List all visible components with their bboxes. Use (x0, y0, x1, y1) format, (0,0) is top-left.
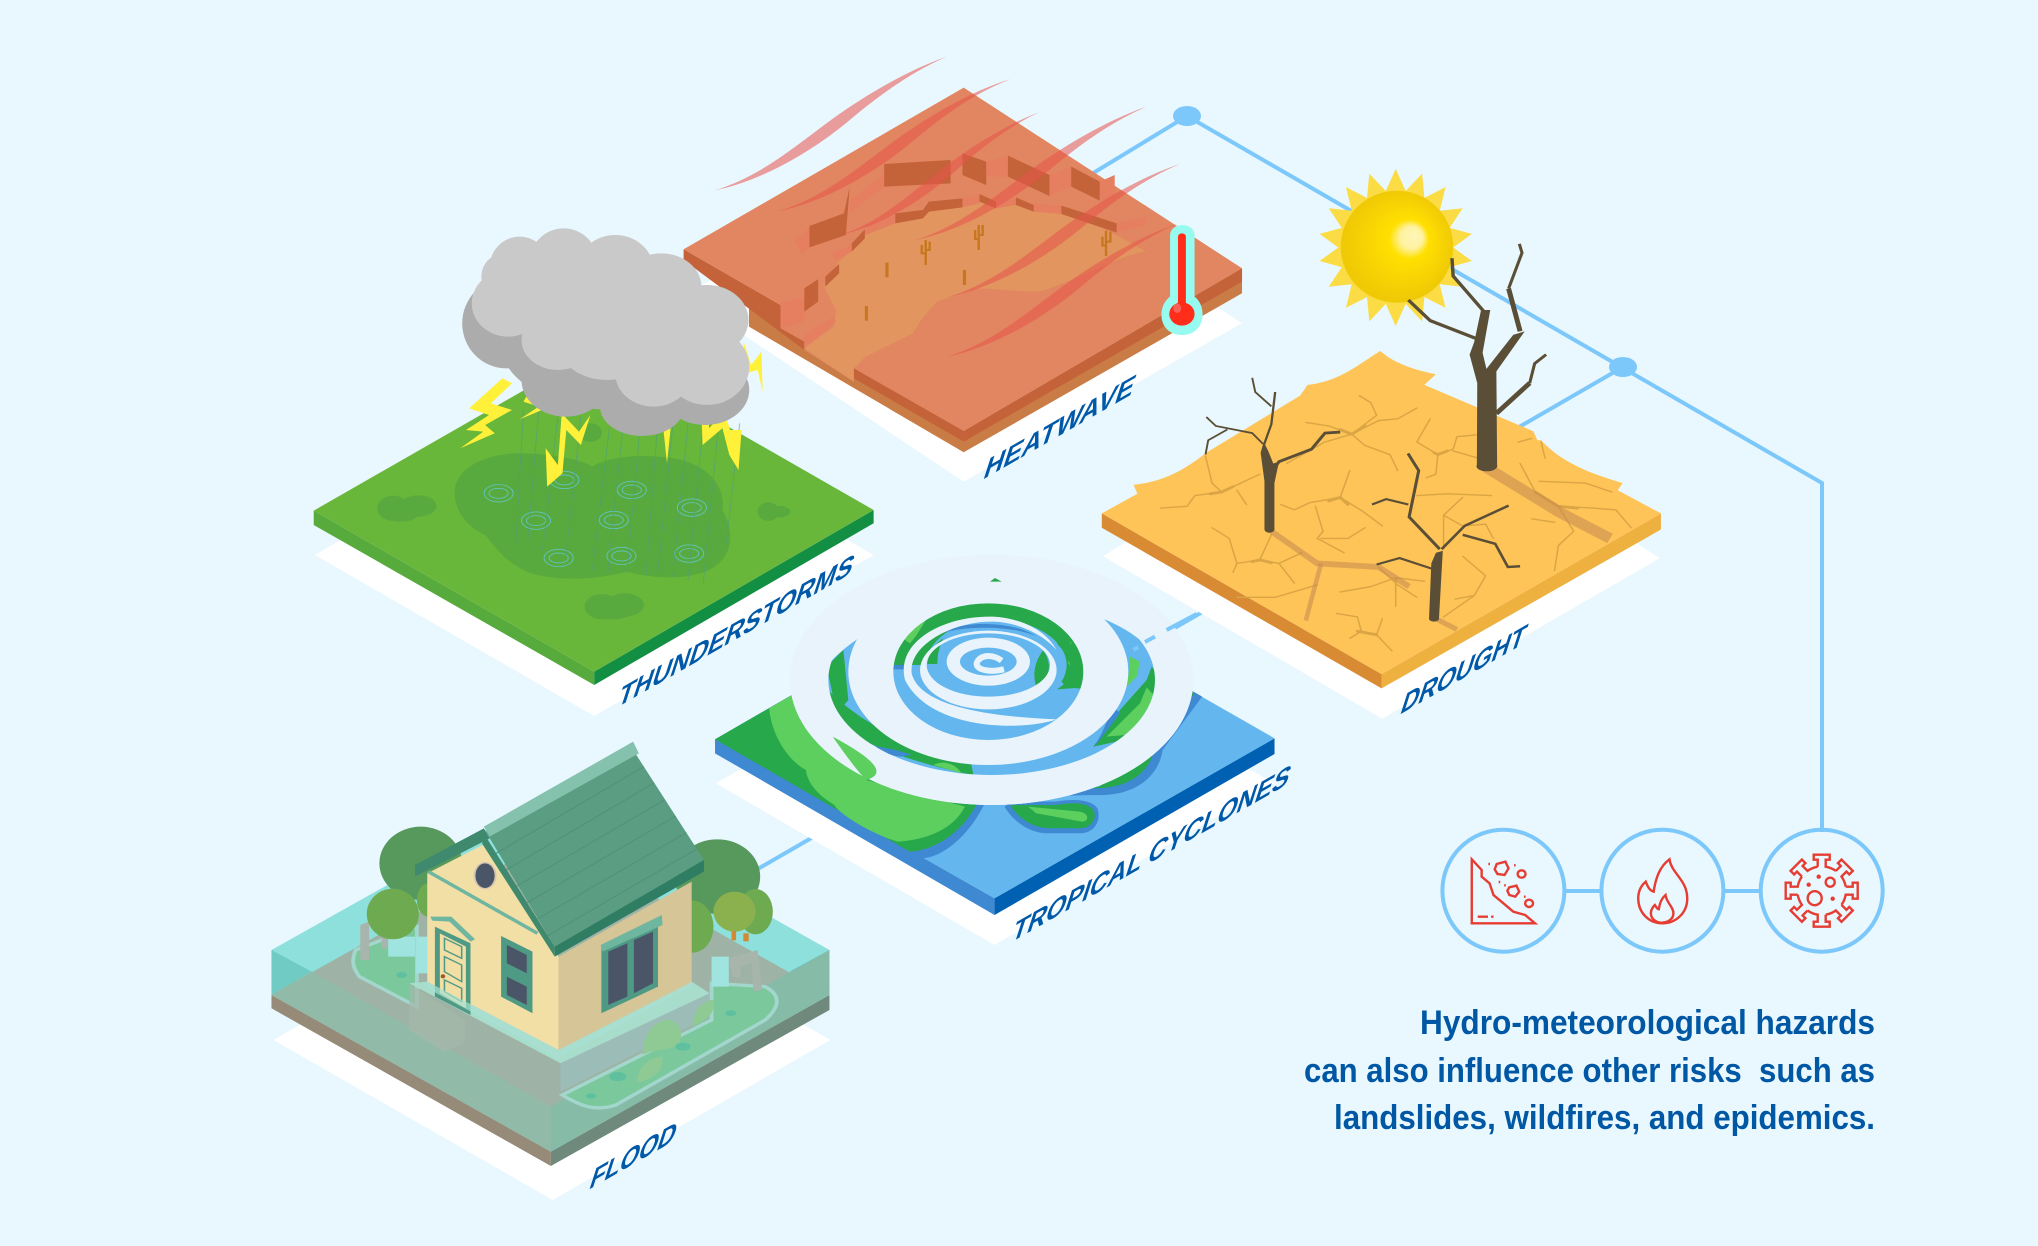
label: drought: DROUGHT (1397, 616, 1531, 722)
panel: related risks icons (1442, 830, 1883, 952)
text block: note on other risks: can also influence other risks such as (1304, 1052, 1875, 1090)
text block: note on other risks: landslides, wildfires, and epidemics. (1334, 1099, 1875, 1137)
white spiral bands (790, 555, 1193, 805)
panel: heatwave (684, 57, 1242, 487)
text block: note on other risks: Hydro-meteorological hazards (1420, 1004, 1875, 1042)
icon: sun (1320, 169, 1472, 326)
roof (415, 742, 704, 957)
storm cloud (462, 228, 749, 436)
underlying map seen through gaps (803, 595, 1167, 776)
flood tile (271, 793, 830, 1200)
icon: epidemic virus (1761, 830, 1883, 952)
trees (367, 827, 773, 953)
thunderstorms tile (314, 342, 874, 716)
door (430, 917, 475, 1015)
icon: thermometer (1161, 225, 1203, 335)
dead trees (1206, 244, 1546, 622)
house and trees (367, 742, 773, 1058)
label: tropical cyclones: TROPICAL CYCLONES (1008, 756, 1296, 950)
tropical cyclones tile (715, 578, 1275, 945)
panel: tropical cyclones (715, 555, 1296, 950)
heatwave tile (684, 57, 1242, 482)
panel: thunderstorms (314, 228, 874, 716)
connector lines (730, 106, 1822, 885)
icon: landslide (1442, 830, 1564, 952)
panel: drought (1102, 169, 1661, 722)
house walls (427, 843, 692, 1050)
label: flood: FLOOD (586, 1113, 682, 1197)
text block: note on other risks (1304, 1004, 1875, 1137)
icon: wildfire (1601, 830, 1723, 952)
cyclone swirl (790, 555, 1197, 805)
windows (501, 915, 663, 1013)
label: thunderstorms: THUNDERSTORMS (614, 546, 859, 715)
label: heatwave: HEATWAVE (980, 366, 1140, 487)
blue core (910, 618, 1083, 712)
drought tile (1102, 351, 1661, 719)
panel: flood (271, 742, 830, 1200)
